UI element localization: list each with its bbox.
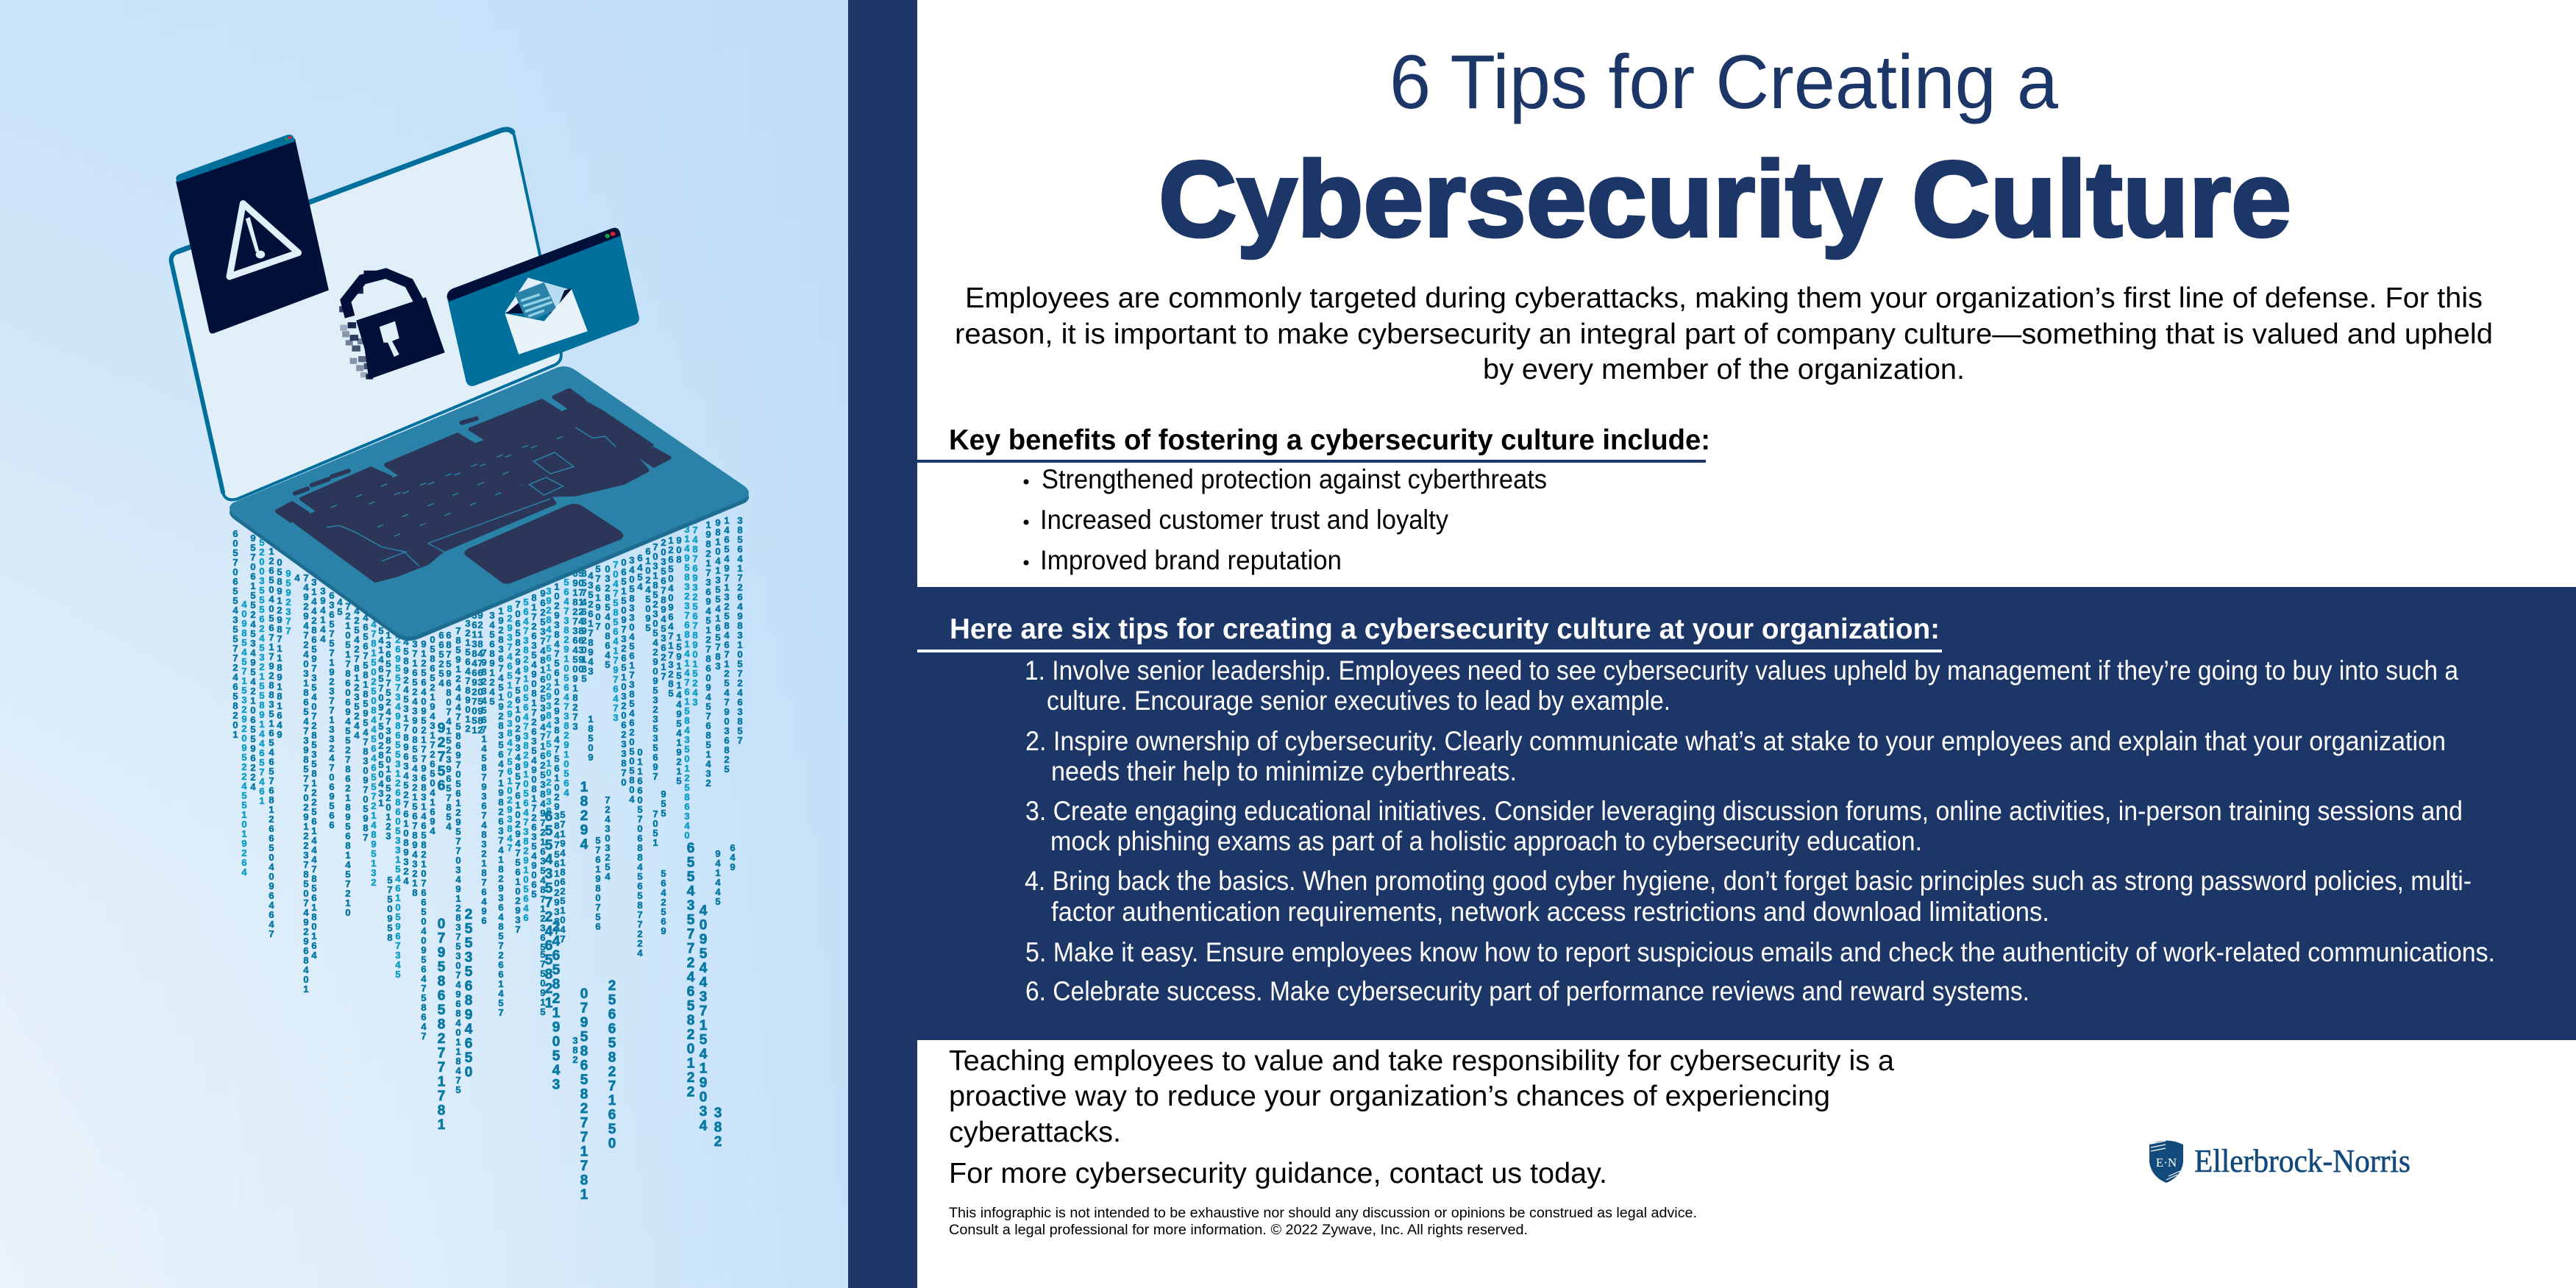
digital rain of falling digits: 256658271650 bbox=[605, 978, 619, 1150]
icon: shield: E·N bbox=[2156, 1156, 2177, 1170]
digital rain of falling digits: 4 bbox=[291, 572, 303, 582]
digital rain of falling digits: 12650405671792883516546576812665040964647 bbox=[266, 546, 277, 938]
closing paragraph bbox=[949, 1045, 1894, 1148]
digital rain of falling digits: 5613846927051 bbox=[469, 610, 480, 734]
navy vertical strip bbox=[848, 0, 917, 1288]
intro paragraph: reason, it is important to make cybersecurity an integral part of company culture—something that is valued and upheld bbox=[955, 319, 2493, 350]
digital rain of falling digits: 655435772465820122 bbox=[683, 841, 699, 1099]
digital rain of falling digits: 392847561029384756102938 bbox=[543, 586, 555, 815]
digital rain of falling digits: 03285408645 bbox=[602, 563, 613, 669]
tip 4: factor authentication requirements, network access restrictions and download limitations. bbox=[1051, 897, 2049, 927]
digital rain of falling digits: 908 bbox=[674, 535, 684, 563]
digital rain of falling digits: 246582190543 bbox=[549, 919, 563, 1092]
digital rain of falling digits: 687596807415239657854 bbox=[443, 630, 455, 830]
digital rain of falling digits: 50712486390 bbox=[575, 568, 587, 673]
digital rain of falling digits: 385641726498310572463857 bbox=[734, 515, 746, 744]
closing paragraph: cyberattacks. bbox=[949, 1117, 1121, 1148]
digital rain of falling digits: 82937465102938475610293847 bbox=[505, 603, 515, 852]
digital rain of falling digits: 724303254 bbox=[602, 794, 613, 880]
digital rain of falling digits: 45892453178963452761089324 bbox=[400, 636, 412, 885]
digital rain of falling digits: 6454 bbox=[634, 552, 646, 591]
digital rain of falling digits: 857463920185 bbox=[578, 568, 590, 683]
digital rain of falling digits: 610245095 bbox=[643, 546, 653, 632]
left panel background bbox=[0, 0, 848, 1288]
benefits list bbox=[1024, 464, 1547, 575]
digital rain of falling digits: 34058330456173854620505804 bbox=[627, 555, 637, 803]
digital rain of falling digits: 1591514495419215 bbox=[674, 632, 684, 785]
laptop illustration bbox=[171, 129, 749, 641]
digital rain of falling digits: 12650409647173285 bbox=[665, 535, 677, 697]
tip 1 bbox=[1025, 655, 2458, 716]
digital rain of falling digits: 7051 bbox=[650, 808, 661, 847]
tip 6: 6. Celebrate success. Make cybersecurity part of performance reviews and reward systems. bbox=[1025, 976, 2029, 1006]
digital rain of falling digits: 079586582771781 bbox=[577, 986, 591, 1202]
digital rain of falling digits: 92756 bbox=[434, 721, 449, 793]
digital rain of falling digits bbox=[230, 515, 759, 1239]
digital rain of falling digits: 5750915 bbox=[537, 949, 549, 1016]
intro paragraph: Employees are commonly targeted during cyberattacks, making them your organization’s first line of defense. For this bbox=[965, 282, 2483, 314]
digital rain of falling digits: 321564789012 bbox=[462, 618, 474, 733]
benefits list: Increased customer trust and loyalty bbox=[1040, 505, 1448, 535]
laptop screen bbox=[171, 129, 561, 499]
digital rain of falling digits: 56473829105647382910564 bbox=[561, 577, 572, 797]
digital rain of falling digits: 65543572465821 bbox=[541, 809, 556, 1010]
digital rain of falling digits: 631985402 bbox=[344, 1006, 356, 1118]
digital rain of falling digits: 3144286597354072853581225614447856180164 bbox=[309, 577, 319, 959]
tip 2: 2. Inspire ownership of cybersecurity. Clearly communicate what’s at stake to your employees and explain that your organization bbox=[1025, 726, 2446, 756]
intro paragraph: by every member of the organization. bbox=[1483, 354, 1965, 385]
digital rain of falling digits: 9218476305982 bbox=[475, 610, 485, 734]
digital rain of falling digits: 203567894536217 bbox=[658, 537, 669, 680]
digital rain of falling digits: 058652194317265041694 bbox=[427, 634, 438, 835]
digital rain of falling digits: 5761907 bbox=[593, 563, 603, 630]
icon: envelope bbox=[505, 278, 588, 355]
digital rain of falling digits: 7859124447586970561295770349128375307496840118475 bbox=[453, 625, 463, 1094]
logo: Ellerbrock-Norris: Ellerbrock-Norris bbox=[2194, 1143, 2410, 1179]
intro paragraph bbox=[955, 282, 2493, 385]
keyboard bbox=[277, 390, 669, 580]
digital rain of falling digits: 5647382910564738291056473829105646 bbox=[521, 597, 531, 922]
tip 2: needs their help to minimize cyberthreats. bbox=[1051, 756, 1517, 786]
digital rain of falling digits: 4781502508445646557214895132 bbox=[368, 619, 380, 886]
tip 3 bbox=[1025, 796, 2463, 856]
digital rain of falling digits: 382 bbox=[569, 1035, 581, 1064]
digital rain of falling digits: 5750958 bbox=[384, 875, 396, 942]
digital rain of falling digits: 1982173694512786094576851432 bbox=[703, 519, 714, 787]
digital rain of falling digits: 5761980756 bbox=[593, 835, 603, 931]
digital rain of falling digits: 912564095217796831465821076650409564758647 bbox=[418, 638, 430, 1040]
digital rain of falling digits: 065150973265103206233870 bbox=[618, 557, 630, 786]
digital rain of falling digits: 6365757192377133247069566 bbox=[327, 590, 337, 829]
digital rain of falling digits: 1365775247382016520123 bbox=[383, 630, 394, 840]
icon: pixelated padlock bbox=[339, 271, 445, 380]
digital rain of falling digits: 465675818595478309705987 bbox=[360, 612, 371, 842]
tip 1: culture. Encourage senior executives to lead by example. bbox=[1047, 686, 1671, 716]
digital rain of falling digits: 79823456714587936748321876496 bbox=[478, 647, 490, 925]
digital rain of falling digits: 7250941638275 bbox=[318, 1025, 330, 1187]
tip 3: 3. Create engaging educational initiatives. Consider leveraging discussion forums, online activities, in-person training sessions and bbox=[1025, 796, 2463, 826]
digital rain of falling digits: 314958323768141476158435012586340 bbox=[681, 524, 693, 839]
digital rain of falling digits: 40985457153292095224551019264 bbox=[238, 599, 250, 876]
digital rain of falling digits: 4095443715419034 bbox=[696, 903, 711, 1133]
digital rain of falling digits: 269557349865531268605331546105967345 bbox=[393, 634, 403, 978]
digital rain of falling digits: 45 bbox=[334, 597, 346, 616]
heading: key benefits: Key benefits of fostering a cybersecurity culture include: bbox=[949, 424, 1710, 456]
digital rain of falling digits: 84027159364 bbox=[746, 1086, 759, 1224]
digital rain of falling digits: 18294 bbox=[577, 780, 591, 852]
digital rain of falling digits: 721051786069455278621895681457210 bbox=[343, 601, 353, 917]
digital rain of falling digits: 43526178943 bbox=[586, 570, 596, 675]
digital rain of falling digits: 57194186251047 bbox=[558, 809, 568, 943]
digital rain of falling digits: 96253748162539471625384972163548712365 bbox=[537, 588, 549, 951]
heading: six tips: Here are six tips for creating a cybersecurity culture at your organization: bbox=[950, 613, 1940, 645]
digital rain of falling digits: 1029384756102938475610293847561029387 bbox=[552, 581, 562, 935]
icon: warning triangle bbox=[230, 204, 299, 277]
disclaimer: Consult a legal professional for more information. © 2022 Zywave, Inc. All rights reserved. bbox=[949, 1223, 1528, 1238]
tip 2 bbox=[1025, 726, 2446, 786]
logo: Ellerbrock-Norris bbox=[2149, 1140, 2410, 1183]
benefits list: Improved brand reputation bbox=[1040, 545, 1342, 575]
digital rain of falling digits: 18509 bbox=[586, 714, 596, 761]
title line two: Cybersecurity Culture bbox=[1159, 139, 2291, 259]
tip 3: mock phishing exams as part of a holistic approach to cybersecurity education. bbox=[1050, 826, 1922, 856]
digital rain of falling digits: 0116605706884565877224 bbox=[634, 747, 646, 957]
digital rain of falling digits: 48213 bbox=[230, 1177, 241, 1239]
digital rain of falling digits: 7031852305429095323535697 bbox=[650, 541, 661, 780]
digital rain of falling digits: 9810413554165783 bbox=[712, 517, 724, 670]
digital rain of falling digits: 6057065543557724658201 bbox=[230, 528, 241, 739]
digital rain of falling digits: 42542781235244 bbox=[352, 605, 362, 739]
digital rain of falling digits: 5200355562453215589144657461 bbox=[256, 537, 268, 805]
closing paragraph: proactive way to reduce your organization’s chances of experiencing bbox=[949, 1081, 1830, 1112]
digital rain of falling digits: 1928367451928356471982637418293648572661457 bbox=[496, 605, 506, 1017]
digital rain of falling digits: 5642569 bbox=[658, 868, 669, 935]
icon: shield bbox=[2149, 1140, 2183, 1183]
digital rain of falling digits: 9592377 bbox=[282, 568, 294, 635]
window: email bbox=[447, 228, 639, 386]
window: alert bbox=[176, 135, 329, 333]
laptop base bbox=[230, 366, 749, 641]
title line one: 6 Tips for Creating a bbox=[1390, 40, 2058, 125]
disclaimer: This infographic is not intended to be exhaustive nor should any discussion or opinions be construed as legal advice. bbox=[949, 1206, 1697, 1221]
disclaimer bbox=[949, 1206, 1697, 1238]
tip 4: 4. Bring back the basics. When promoting good cyber hygiene, don’t forget basic principles such as strong password policies, multi- bbox=[1025, 866, 2472, 896]
digital rain of falling digits: 394144 bbox=[318, 586, 328, 643]
digital rain of falling digits: 0589129871189181649 bbox=[274, 557, 285, 739]
digital rain of falling digits: 3456891245 bbox=[487, 610, 497, 705]
digital rain of falling digits: 649 bbox=[727, 842, 739, 871]
digital rain of falling digits: 079586582771781 bbox=[434, 917, 449, 1131]
trackpad bbox=[464, 504, 623, 584]
panel: six tips bbox=[917, 587, 2576, 1040]
digital rain of falling digits: 0571836429158 bbox=[230, 1047, 241, 1209]
digital rain of falling digits: 371652439085543215678943218 bbox=[409, 638, 421, 897]
call to action: For more cybersecurity guidance, contact us today. bbox=[949, 1158, 1607, 1189]
digital rain of falling digits: 74929472403186547398577029122378507492968401 bbox=[300, 572, 312, 993]
digital rain of falling digits: 81726354908172635490817263549065 bbox=[528, 592, 540, 898]
digital rain of falling digits: 146549713258467125479036825 bbox=[721, 515, 733, 773]
digital rain of falling digits: 70658294756102934857610294756102937 bbox=[512, 599, 524, 933]
digital rain of falling digits: 665254 bbox=[435, 630, 447, 687]
digital rain of falling digits: 70475856417976473 bbox=[611, 559, 621, 722]
digital rain of falling digits: 09182736450918273 bbox=[569, 568, 581, 730]
digital rain of falling digits: 57487693256789015243 bbox=[690, 515, 700, 706]
digital rain of falling digits: 5414657097502850431 bbox=[375, 625, 387, 807]
closing paragraph: Teaching employees to value and take responsibility for cybersecurity is a bbox=[949, 1045, 1894, 1077]
digital rain of falling digits: 955 bbox=[658, 789, 669, 817]
digital rain of falling digits: 957061552453495421065596224 bbox=[247, 533, 259, 791]
benefits list: Strengthened protection against cyberthreats bbox=[1042, 464, 1547, 494]
digital rain of falling digits: 382 bbox=[711, 1106, 725, 1149]
digital rain of falling digits: 255356894650 bbox=[460, 907, 477, 1079]
tip 1: 1. Involve senior leadership. Employees need to see cybersecurity values upheld by management if they’re going to buy into such a bbox=[1025, 655, 2458, 686]
tip 4 bbox=[1025, 866, 2472, 927]
digital rain of falling digits: 941445 bbox=[712, 848, 724, 905]
